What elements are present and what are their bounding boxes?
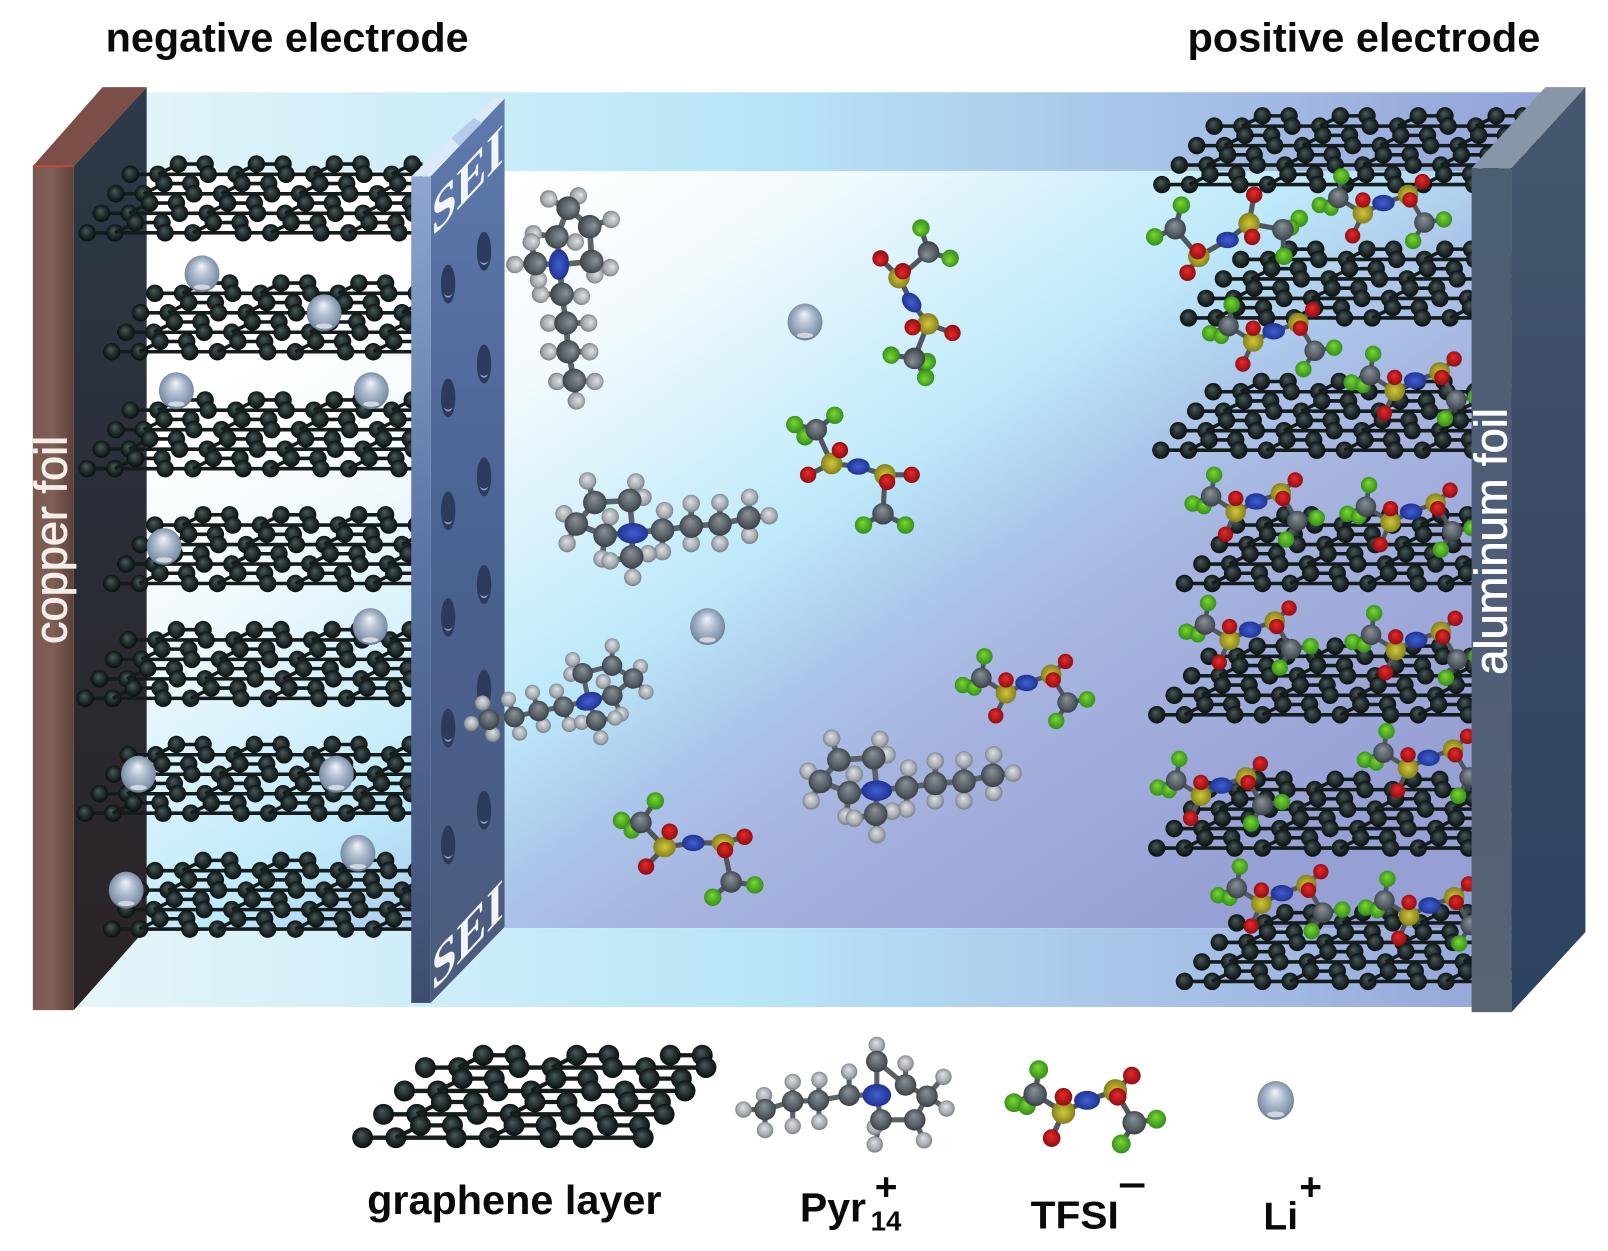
floor band <box>74 928 1543 1007</box>
TFSI anions in positive electrode <box>1146 168 1498 952</box>
legend label: Pyr14+: Pyr <box>800 1184 866 1230</box>
Pyr14 cation, lower right <box>799 730 1022 843</box>
label: SEI top: SEI <box>432 111 504 251</box>
heading: negative electrode: negative electrode <box>106 14 469 60</box>
legend label: Pyr14+: 14 <box>871 1206 902 1237</box>
copper foil <box>26 87 147 1010</box>
Pyr14 cation, crossing SEI <box>452 630 667 784</box>
Pyr14 cation, top left <box>506 187 620 410</box>
aluminum foil <box>1465 87 1585 1012</box>
copper foil inner face <box>74 87 147 1010</box>
legend label: TFSI-: TFSI <box>1031 1195 1119 1238</box>
legend icon: lithium ion <box>1257 1081 1294 1120</box>
SEI pores <box>441 232 491 864</box>
legend icon: TFSI anion <box>1004 1060 1166 1153</box>
TFSI anion, bottom <box>613 792 763 906</box>
lithium ion, centre <box>690 608 725 645</box>
electrolyte back wall <box>74 171 1543 928</box>
positive electrode graphene stack <box>1148 107 1538 990</box>
legend icon: Pyr14 cation <box>735 1037 955 1153</box>
legend label: Pyr14+: + <box>875 1166 898 1209</box>
panel: battery cell interior <box>74 92 1543 1007</box>
legend icon: graphene layer <box>352 1045 716 1148</box>
lithium ion, upper <box>788 304 822 340</box>
legend label: Pyr14+ <box>800 1166 902 1237</box>
legend label: Li+ <box>1263 1166 1322 1239</box>
Pyr14 cation, centre <box>555 472 778 586</box>
negative electrode graphene stack <box>76 155 422 938</box>
legend label: graphene layer: graphene layer <box>367 1177 661 1223</box>
label: copper foil: copper foil <box>26 436 77 644</box>
SEI layer <box>411 98 505 1005</box>
label: aluminum foil: aluminum foil <box>1465 408 1516 675</box>
legend <box>352 1037 1322 1239</box>
TFSI anion, upper <box>826 212 1010 396</box>
TFSI anion, centre <box>786 407 920 534</box>
TFSI anion, right <box>955 648 1095 729</box>
legend label: Li+: + <box>1299 1166 1322 1209</box>
ceiling band <box>74 92 1543 171</box>
legend label: TFSI- <box>1031 1183 1144 1238</box>
legend label: Li+: Li <box>1263 1196 1298 1239</box>
label: SEI bottom: SEI <box>432 866 504 1005</box>
heading: positive electrode: positive electrode <box>1188 14 1540 60</box>
lithium ions in negative electrode <box>109 255 389 909</box>
